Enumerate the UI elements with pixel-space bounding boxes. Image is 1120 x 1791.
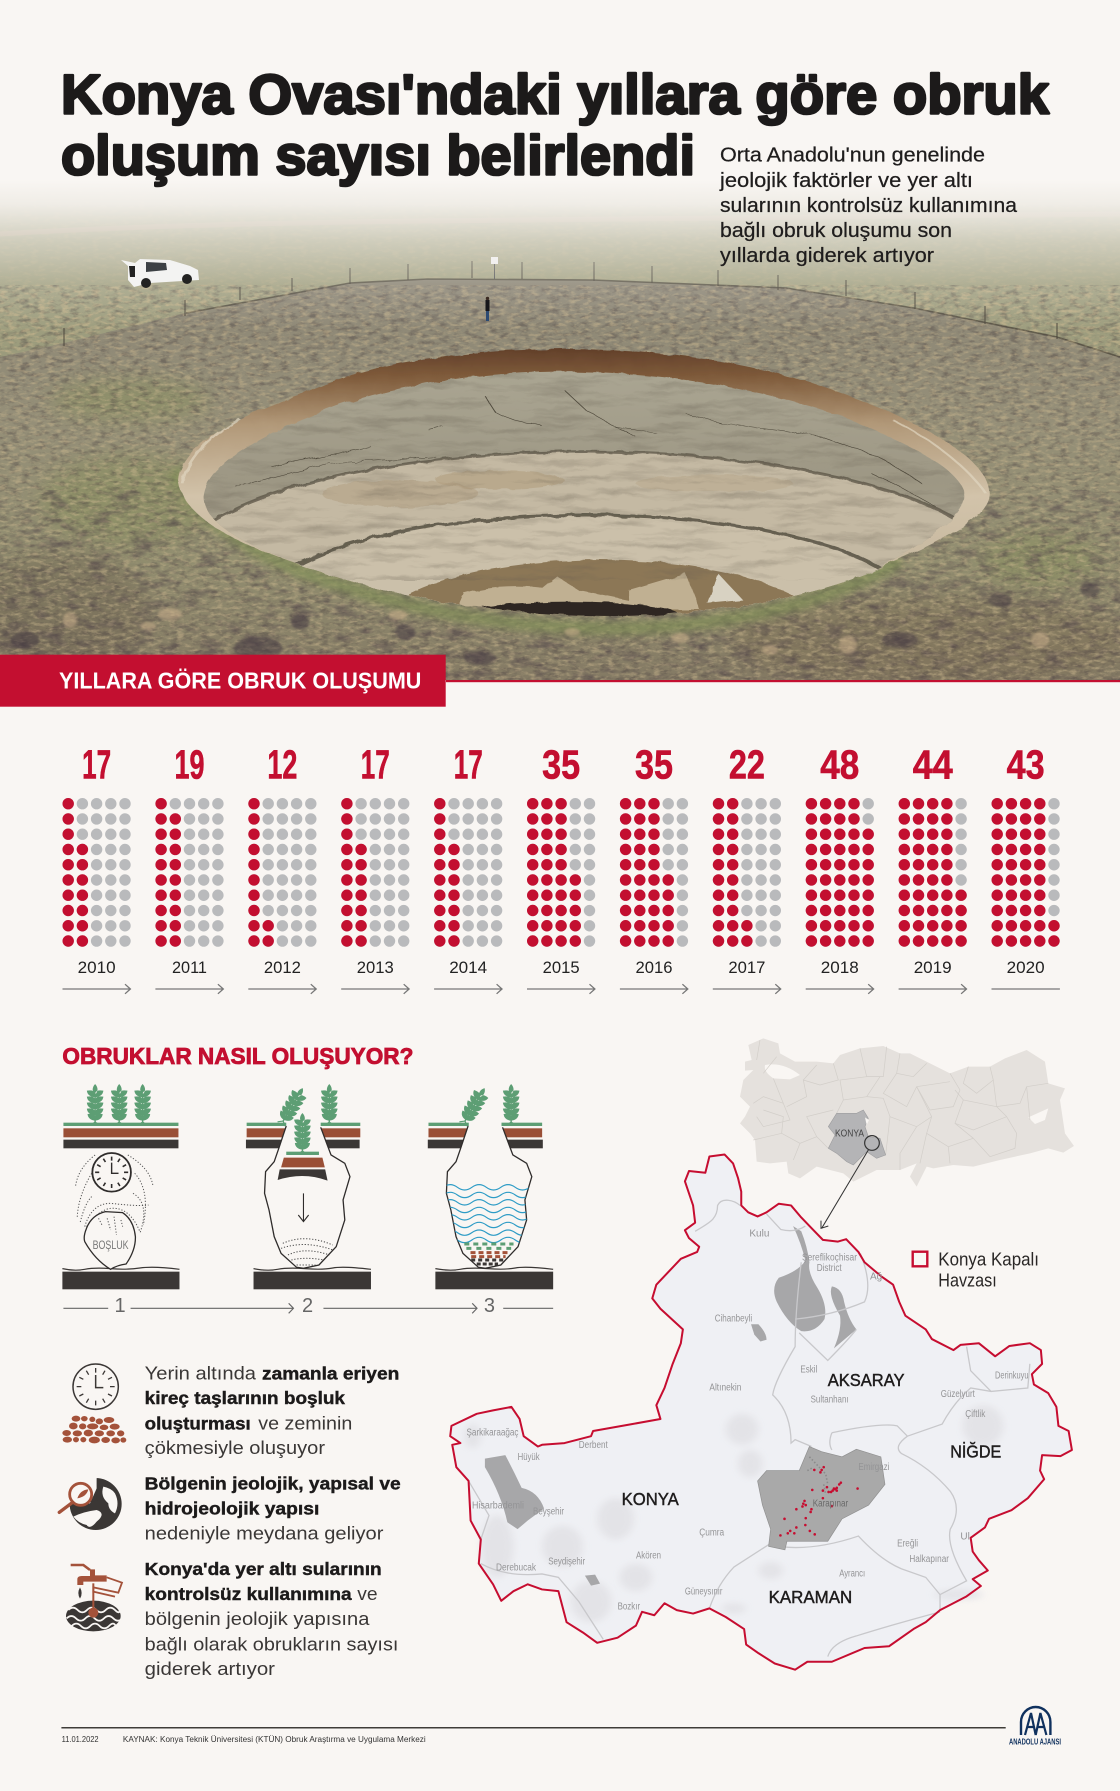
district labels: Şarkikaraağaç (466, 1428, 518, 1438)
map: Turkey locator (740, 1038, 1074, 1228)
person (486, 297, 490, 321)
province labels: KONYA (622, 1489, 679, 1509)
province labels (622, 1370, 1001, 1607)
step 1 (62, 1084, 179, 1289)
step numbers: 3 (484, 1295, 495, 1317)
year 2017 (713, 741, 781, 994)
subtitle: Orta Anadolu'nun genelinde (720, 145, 985, 167)
label: void: BOŞLUK (93, 1240, 129, 1252)
Karapinar study area (758, 1447, 885, 1550)
year 2010 (62, 741, 130, 994)
step numbers: 1 (114, 1295, 126, 1317)
text: groundwater: ve (357, 1584, 378, 1604)
district labels: Derinkuyu (995, 1370, 1028, 1381)
text: limestone (145, 1363, 399, 1458)
rubble (464, 1244, 514, 1264)
year 2012: 2012 (264, 959, 301, 977)
icon: globe and magnifier (59, 1475, 122, 1530)
text: limestone: zamanla eriyen (262, 1363, 399, 1383)
water waves (443, 1185, 530, 1243)
footer date and source: 11.01.2022 (62, 1735, 99, 1744)
photo: Konya sinkhole aerial view (0, 195, 1120, 680)
dirt road (0, 214, 1120, 234)
basin outline (450, 1154, 1072, 1670)
district labels: Derebucak (496, 1562, 537, 1573)
icon: clock and limestone (62, 1364, 126, 1443)
year 2017: 22 (729, 741, 765, 787)
heading: how sinkholes form: OBRUKLAR NASIL OLUŞUYOR? (62, 1043, 413, 1069)
wall cracks (236, 390, 936, 507)
subtitle: yıllarda giderek artıyor (720, 245, 934, 267)
Konya province (828, 1110, 886, 1165)
fence posts (64, 261, 1057, 346)
year 2020: 2020 (1007, 959, 1045, 977)
roads and borders (469, 1200, 1030, 1657)
year 2011: 2011 (172, 959, 207, 977)
step arrows (63, 1303, 553, 1313)
year 2018 (806, 741, 874, 994)
year 2017: 2017 (728, 959, 765, 977)
district labels: Hisarbademli (472, 1500, 524, 1512)
text: groundwater: bağlı olarak obrukların sayısı (145, 1635, 398, 1655)
subtitle (719, 145, 1018, 267)
fog gradient (0, 170, 1120, 316)
step 2 (246, 1084, 371, 1289)
district labels: Ereğli (897, 1538, 918, 1549)
legend: Konya closed basin: Konya Kapalı (938, 1249, 1039, 1270)
year 2011: 19 (175, 741, 205, 787)
year 2014 (434, 741, 502, 994)
district labels: District (817, 1263, 842, 1274)
district labels: Karapınar (813, 1499, 849, 1510)
district labels: Cihanbeyli (715, 1314, 752, 1324)
year 2012: 12 (267, 741, 297, 787)
legend: Konya closed basin (913, 1249, 1039, 1291)
year 2011 (155, 741, 223, 994)
white car (121, 259, 199, 288)
year 2010: 17 (82, 741, 111, 787)
district labels: Seydişehir (548, 1557, 586, 1568)
subtitle: sularının kontrolsüz kullanımına (720, 195, 1018, 217)
year 2010: 2010 (78, 959, 116, 977)
year 2013: 17 (361, 741, 390, 787)
text: groundwater: kontrolsüz kullanımına (145, 1584, 352, 1604)
text: groundwater: bölgenin jeolojik yapısına (145, 1609, 371, 1629)
basin area (450, 1154, 1072, 1670)
text: groundwater: Konya'da yer altı sularının (145, 1559, 382, 1579)
title: oluşum sayısı belirlendi (61, 124, 695, 186)
clock (92, 1153, 131, 1192)
year 2013: 2013 (357, 959, 394, 977)
year 2013 (341, 741, 409, 994)
step numbers (114, 1295, 495, 1317)
dot chart: sinkholes per year (62, 741, 1060, 994)
year 2016: 2016 (635, 959, 672, 977)
text: limestone: kireç taşlarının boşluk (145, 1388, 345, 1408)
text: geology (145, 1473, 401, 1543)
map: Turkey locator: KONYA (835, 1129, 864, 1140)
diagram: three formation steps (62, 1084, 553, 1317)
year 2020 (992, 741, 1060, 989)
year 2014: 2014 (449, 959, 487, 977)
province labels: KARAMAN (769, 1587, 852, 1607)
text: groundwater: giderek artıyor (145, 1659, 275, 1679)
district labels: Ayrancı (839, 1568, 865, 1579)
district labels: Bozkır (618, 1601, 641, 1612)
title (61, 62, 1050, 186)
year 2018: 2018 (821, 959, 859, 977)
year 2019: 2019 (914, 959, 952, 977)
text: groundwater (145, 1559, 398, 1679)
logo: Anadolu Ajansı (1009, 1707, 1061, 1746)
district labels: Güzelyurt (941, 1389, 975, 1400)
sign post (491, 257, 498, 279)
lakes (485, 1226, 856, 1586)
sinkhole points (780, 1467, 858, 1535)
district labels: Derbent (579, 1440, 608, 1451)
zoom arrow (865, 1136, 879, 1150)
text: limestone: çökmesiyle oluşuyor (145, 1438, 325, 1458)
text: limestone: Yerin altında (145, 1363, 257, 1383)
section banner: yearly sinkholes: YILLARA GÖRE OBRUK OLUŞUMU (59, 668, 421, 694)
province labels: AKSARAY (828, 1370, 905, 1390)
year 2015 (527, 741, 595, 994)
year 2015: 2015 (543, 959, 580, 977)
raised mound (0, 279, 1120, 680)
year 2016: 35 (635, 741, 673, 787)
district labels: Halkapınar (909, 1554, 950, 1565)
district labels: Akören (636, 1551, 661, 1562)
subtitle: jeolojik faktörler ve yer altı (719, 170, 973, 192)
footer date and source: KAYNAK: Konya Teknik Üniversitesi (KTÜN) Obruk Araştırma ve Uygulama Merkezi (123, 1735, 426, 1744)
year 2019: 44 (913, 741, 953, 787)
province labels: NİĞDE (950, 1442, 1001, 1462)
section banner: yearly sinkholes (0, 655, 1120, 707)
legend: Konya closed basin: Havzası (938, 1270, 997, 1291)
district labels: Altınekin (709, 1383, 741, 1394)
district labels (466, 1228, 1028, 1612)
shrubs (11, 583, 1100, 665)
year 2018: 48 (820, 741, 859, 787)
text: limestone: ve zeminin (258, 1413, 352, 1433)
step 3 (428, 1084, 553, 1289)
crater (178, 348, 990, 616)
district labels: Çiftlik (965, 1409, 986, 1420)
year 2015: 35 (542, 741, 580, 787)
district labels: Sultanhanı (811, 1395, 849, 1406)
text: geology: Bölgenin jeolojik, yapısal ve (145, 1473, 401, 1493)
step numbers: 2 (302, 1295, 313, 1317)
year 2012 (248, 741, 316, 994)
text: geology: nedeniyle meydana geliyor (145, 1523, 383, 1543)
footer rule (61, 1727, 1006, 1728)
district labels: Kulu (749, 1228, 769, 1239)
district labels: Güneysınır (685, 1587, 723, 1598)
title: Konya Ovası'ndaki yıllara göre obruk (61, 62, 1050, 126)
district labels: Çumra (699, 1527, 725, 1538)
subtitle: bağlı obruk oluşumu son (720, 220, 952, 242)
district labels: Ağ (870, 1272, 882, 1282)
year 2020: 43 (1007, 741, 1045, 787)
district labels: Emirgazi (858, 1462, 889, 1473)
year 2014: 17 (454, 741, 483, 787)
district labels: Eskil (800, 1364, 817, 1375)
map: Konya closed basin (450, 1154, 1072, 1670)
district labels: Beyşehir (533, 1507, 565, 1518)
text: limestone: oluşturması (145, 1413, 251, 1433)
year 2016 (620, 741, 688, 994)
text: geology: hidrojeolojik yapısı (145, 1499, 319, 1519)
district labels: Ul (960, 1531, 970, 1542)
district labels: Şereflikoçhisar (802, 1252, 858, 1264)
green verge around crater (175, 470, 900, 628)
logo: Anadolu Ajansı: ANADOLU AJANSI (1009, 1737, 1061, 1746)
terrain shading (464, 1405, 1003, 1622)
year 2019 (899, 741, 966, 994)
icon: tap and groundwater (66, 1565, 123, 1631)
district labels: Hüyük (518, 1452, 540, 1463)
